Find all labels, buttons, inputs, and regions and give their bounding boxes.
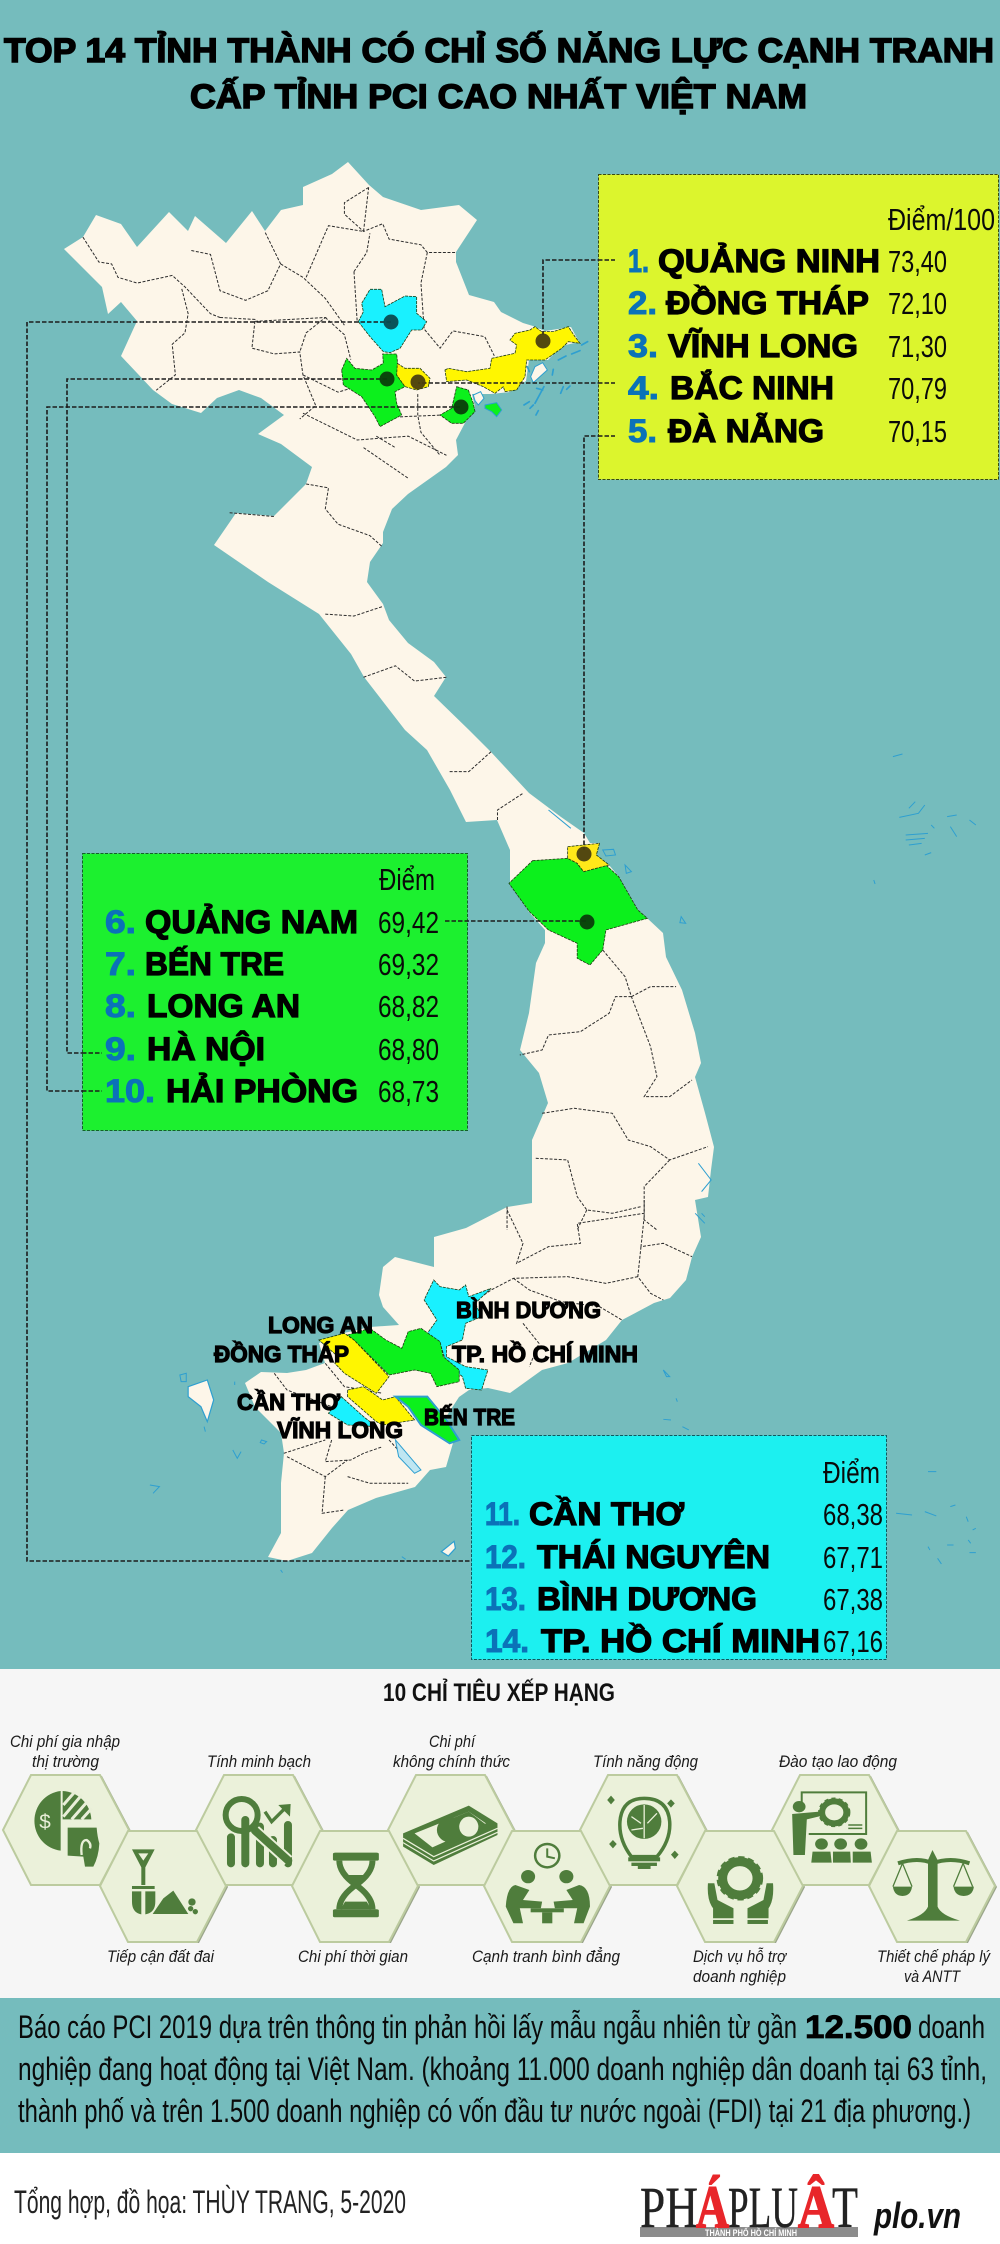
logo: Pháp Luật: T: [832, 2175, 858, 2240]
row 10: [105, 1073, 439, 1109]
hexagon row: [3, 1775, 995, 1942]
row 13: [485, 1581, 883, 1617]
title: TOP 14 TỈNH THÀNH CÓ CHỈ SỐ NĂNG LỰC CẠNH TRANH: [4, 31, 994, 70]
row 11: [485, 1496, 883, 1532]
criteria labels: Chi phí gia nhập: [10, 1732, 120, 1751]
row 10: HẢI PHÒNG: [166, 1073, 358, 1109]
provinces south borders: [274, 1200, 692, 1513]
credit: Tổng hợp, đồ họa: THÙY TRANG, 5-2020: [14, 2184, 406, 2220]
location dots: [380, 314, 594, 930]
map labels south: LONG AN: [268, 1312, 373, 1338]
map labels south: VĨNH LONG: [277, 1416, 403, 1443]
row 3: 3.: [628, 328, 658, 364]
row 7: 7.: [105, 946, 136, 982]
row 6: 6.: [105, 904, 136, 940]
icon: banknote stack: [403, 1806, 497, 1865]
row 4: BẮC NINH: [670, 370, 834, 406]
row 9: HÀ NỘI: [147, 1031, 265, 1067]
criteria labels: Tính năng động: [593, 1752, 698, 1771]
criteria labels: Đào tạo lao động: [779, 1752, 897, 1771]
row 3: 71,30: [888, 329, 947, 364]
row 8: 68,82: [378, 989, 439, 1024]
panel: top 1-5: [598, 174, 998, 480]
icon: market entry pie: $: [39, 1810, 51, 1833]
criteria labels: doanh nghiệp: [693, 1967, 786, 1986]
criteria labels: [10, 1732, 991, 1986]
Bình Dương and TP. Hồ Chí Minh: [424, 1280, 491, 1390]
row 7: BẾN TRE: [145, 946, 284, 982]
row 2: [628, 285, 947, 321]
logo: plo.vn: plo.vn: [873, 2195, 961, 2236]
row 2: 2.: [628, 285, 657, 321]
coastal islands central: [549, 810, 711, 1223]
row 3: [628, 328, 947, 364]
row 9: 68,80: [378, 1032, 439, 1067]
row 14: [485, 1623, 883, 1659]
row 9: [105, 1031, 439, 1067]
Quảng Nam: [509, 858, 647, 965]
row 8: [105, 988, 439, 1024]
row 4: [628, 370, 947, 406]
row 9: 9.: [105, 1031, 136, 1067]
icon: scales: [893, 1850, 974, 1921]
Cần Thơ: [328, 1397, 376, 1427]
row 11: CẦN THƠ: [529, 1496, 685, 1532]
Hạ Long islands: [473, 342, 588, 417]
row 8: 8.: [105, 988, 136, 1024]
criteria labels: Dịch vụ hỗ trợ: [693, 1947, 788, 1966]
logo: Pháp Luật: PH: [640, 2175, 698, 2240]
Hà Nội: [342, 354, 405, 427]
row 5: [628, 413, 947, 449]
criteria labels: Tính minh bạch: [207, 1752, 311, 1771]
map of Vietnam: [64, 162, 976, 1573]
highlighted provinces north: [342, 289, 588, 427]
logo: Pháp Luật: THÀNH PHỐ HỒ CHÍ MINH: [705, 2227, 797, 2238]
row 6: 69,42: [378, 905, 439, 940]
row 10: 68,73: [378, 1074, 439, 1109]
icon: training: [792, 1792, 872, 1863]
row 12: 67,71: [823, 1540, 883, 1575]
panel: top 11-14: [472, 1436, 886, 1660]
Côn Đảo: [441, 1541, 455, 1556]
criteria heading: 10 CHỈ TIÊU XẾP HẠNG: [383, 1677, 615, 1707]
map labels south: BẾN TRE: [424, 1403, 515, 1430]
row 5: 5.: [628, 413, 657, 449]
panel: 10 ranking criteria: [0, 1669, 1000, 1998]
Vĩnh Long: [348, 1387, 415, 1425]
row 8: LONG AN: [147, 988, 300, 1024]
row 6: QUẢNG NAM: [145, 904, 358, 940]
hexagon shadows: [5, 1776, 997, 1943]
Bắc Ninh: [397, 363, 430, 390]
icon: gear in hands: [708, 1858, 773, 1924]
row 4: 4.: [628, 370, 659, 406]
criteria labels: thị trường: [32, 1752, 99, 1771]
Hoàng Sa islands: [874, 754, 976, 884]
row 13: 13.: [485, 1581, 526, 1617]
map labels south: CẦN THƠ: [237, 1388, 340, 1415]
row 6: [105, 904, 439, 940]
icon: hourglass: [333, 1853, 379, 1917]
icon: magnifier transparency: [226, 1799, 291, 1863]
row 1: [628, 243, 947, 279]
icon: shovel: [132, 1849, 198, 1914]
row 1: QUẢNG NINH: [658, 243, 880, 279]
row 14: TP. HỒ CHÍ MINH: [541, 1623, 820, 1659]
icon: brain lightbulb: [607, 1796, 679, 1869]
Mekong estuary: [395, 1440, 421, 1473]
provinces north borders: [83, 187, 494, 681]
row 13: 67,38: [823, 1582, 883, 1617]
row 12: 12.: [485, 1539, 526, 1575]
Hải Phòng: [440, 387, 475, 423]
row 3: VĨNH LONG: [668, 328, 858, 364]
Thái Nguyên: [358, 289, 427, 353]
row 12: THÁI NGUYÊN: [537, 1539, 770, 1575]
row 14: 67,16: [823, 1624, 883, 1659]
logo: Pháp Luật: [640, 2174, 858, 2240]
Phú Quốc island: [188, 1380, 214, 1422]
logo: Pháp Luật: Á: [696, 2174, 729, 2240]
Đồng Tháp: [319, 1333, 389, 1393]
panel: top 6-10: [82, 854, 468, 1130]
map labels south: TP. HỒ CHÍ MINH: [452, 1340, 638, 1367]
row 7: [105, 946, 439, 982]
map labels south: BÌNH DƯƠNG: [456, 1296, 601, 1323]
logo: Pháp Luật: Â: [798, 2174, 834, 2240]
points header: Điểm: [823, 1455, 880, 1490]
provinces central borders: [450, 752, 708, 1230]
row 10: 10.: [105, 1073, 155, 1109]
criteria labels: Chi phí: [429, 1732, 477, 1751]
title: [4, 31, 994, 116]
criteria labels: và ANTT: [904, 1967, 961, 1986]
highlighted provinces south: [150, 1213, 976, 1573]
row 2: 72,10: [888, 286, 947, 321]
Long An: [348, 1328, 459, 1387]
row 5: 70,15: [888, 414, 947, 449]
row 1: 1.: [628, 243, 649, 279]
row 7: 69,32: [378, 947, 439, 982]
row 11: 68,38: [823, 1497, 883, 1532]
icons in zoomed coordinates: [333, 1792, 974, 1924]
criteria labels: không chính thức: [393, 1752, 510, 1771]
criteria labels: Tiếp cận đất đai: [107, 1947, 215, 1966]
highlighted provinces central: [509, 754, 976, 1223]
row 5: ĐÀ NẴNG: [668, 413, 824, 449]
text block: PCI report note: [0, 1998, 1000, 2153]
title: CẤP TỈNH PCI CAO NHẤT VIỆT NAM: [190, 78, 807, 116]
map labels south: ĐỒNG THÁP: [214, 1340, 349, 1367]
criteria labels: Cạnh tranh bình đẳng: [472, 1947, 620, 1966]
row 11: 11.: [485, 1496, 520, 1532]
southern islands: [150, 1213, 976, 1573]
map labels south: [214, 1296, 638, 1443]
points header: Điểm: [379, 862, 435, 897]
row 12: [485, 1539, 883, 1575]
row 1: 73,40: [888, 244, 947, 279]
icon: market entry pie: [34, 1791, 99, 1867]
map land outline: [64, 162, 714, 1561]
Đà Nẵng: [568, 843, 609, 872]
leader lines: [27, 260, 615, 1561]
icon: equal competition meeting: [506, 1844, 590, 1923]
Quảng Ninh: [445, 327, 580, 393]
row 4: 70,79: [888, 371, 947, 406]
criteria labels: Chi phí thời gian: [298, 1947, 408, 1966]
Bến Tre: [395, 1397, 459, 1443]
footer panel: [0, 2153, 1000, 2244]
row 14: 14.: [485, 1623, 529, 1659]
text block: PCI report note: 12.500: [805, 2009, 912, 2045]
row 13: BÌNH DƯƠNG: [537, 1581, 757, 1617]
logo: Pháp Luật: PLU: [728, 2175, 798, 2240]
central islands: [603, 849, 686, 923]
row 2: ĐỒNG THÁP: [666, 285, 869, 321]
